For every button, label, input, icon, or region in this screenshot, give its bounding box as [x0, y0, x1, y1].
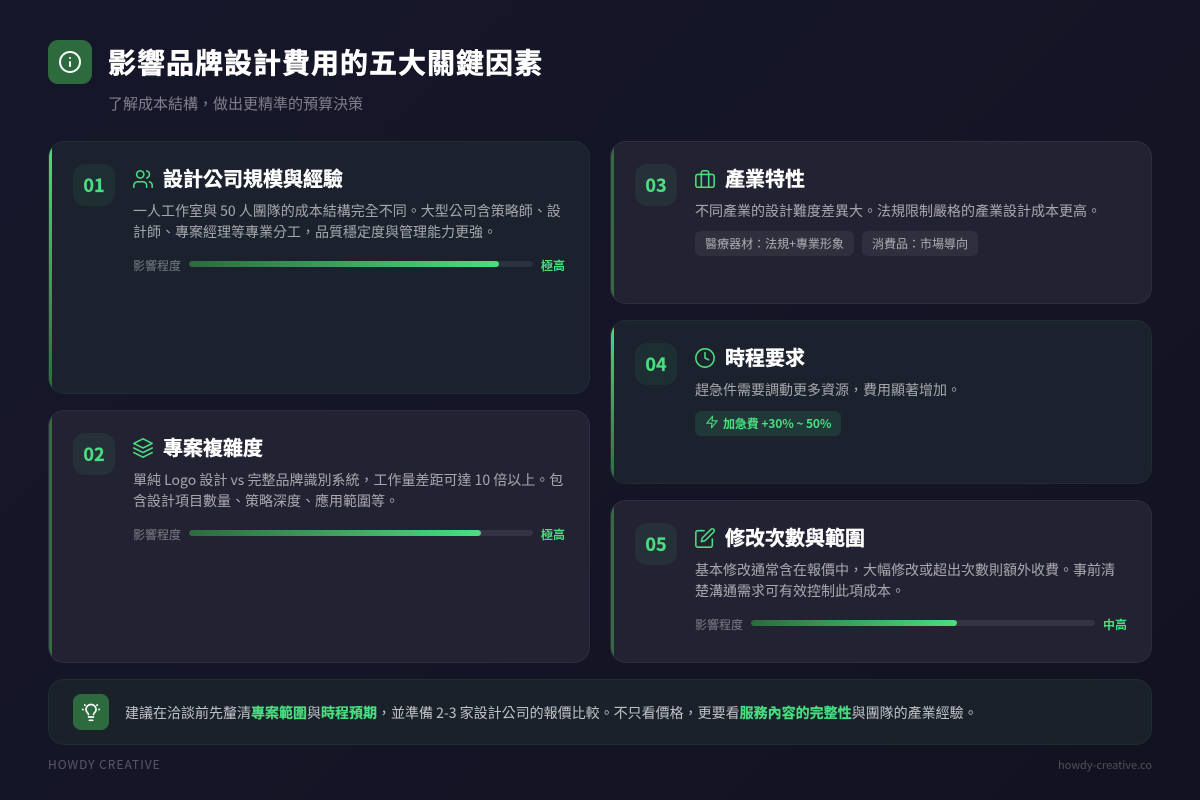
callout: advice — [48, 679, 1152, 745]
icon: briefcase — [695, 170, 715, 188]
number badge 04 — [635, 343, 677, 385]
description 02: 含設計項目數量、策略深度、應用範圍等。 — [133, 491, 399, 511]
number badge 05: 05 — [645, 531, 667, 557]
panel: factor 01 — [48, 141, 590, 394]
impact bar 05: 60% — [751, 620, 1095, 626]
number badge 02 — [73, 433, 115, 475]
number badge 04: 04 — [645, 351, 667, 377]
advice text: 建議在洽談前先釐清專案範圍與時程預期，並準備 2-3 家設計公司的報價比較。不只看價格，更要看服務內容的完整性與團隊的產業經驗。 — [125, 703, 978, 723]
description 01: 計師、專案經理等專業分工，品質穩定度與管理能力更強。 — [133, 222, 497, 242]
description 05: 楚溝通需求可有效控制此項成本。 — [695, 581, 905, 601]
tag: rush fee: 加急費 +30% ~ 50% — [723, 415, 831, 432]
number badge 03 — [635, 164, 677, 206]
impact value 05: 中高 — [1103, 616, 1127, 633]
description 02: 單純 Logo 設計 vs 完整品牌識別系統，工作量差距可達 10 倍以上。包 — [133, 470, 563, 490]
number badge 01: 01 — [83, 172, 105, 198]
tag: rush fee — [695, 411, 841, 436]
number badge 05 — [635, 523, 677, 565]
panel: factor 03 — [610, 141, 1152, 304]
impact label 01: 影響程度 — [133, 257, 181, 274]
impact bar 01: 90% — [189, 261, 533, 267]
number badge 01 — [73, 164, 115, 206]
heading 01: 設計公司規模與經驗 — [163, 163, 343, 192]
description 01: 一人工作室與 50 人團隊的成本結構完全不同。大型公司含策略師、設 — [133, 201, 561, 221]
heading 03: 產業特性 — [725, 163, 805, 192]
description 02 — [133, 470, 563, 511]
icon: edit — [695, 528, 715, 548]
panel: factor 05 — [610, 500, 1152, 663]
tag: consumer goods: 消費品：市場導向 — [872, 235, 968, 252]
header icon: info — [48, 40, 92, 84]
impact label 05: 影響程度 — [695, 616, 743, 633]
heading 04: 時程要求 — [725, 342, 805, 371]
title: 影響品牌設計費用的五大關鍵因素 — [108, 42, 543, 82]
impact label 02: 影響程度 — [133, 526, 181, 543]
tag: medical — [695, 231, 854, 256]
description 05: 基本修改通常含在報價中，大幅修改或超出次數則額外收費。事前清 — [695, 560, 1115, 580]
icon: clock — [695, 348, 715, 368]
icon: layers — [133, 438, 153, 458]
description 04: 趕急件需要調動更多資源，費用顯著增加。 — [695, 380, 961, 400]
footer url: howdy-creative.co — [1058, 757, 1152, 773]
description 05 — [695, 560, 1115, 601]
heading 05: 修改次數與範圍 — [725, 522, 865, 551]
footer brand: HOWDY CREATIVE — [48, 756, 161, 773]
tag: medical: 醫療器材：法規+專業形象 — [705, 235, 844, 252]
panel: factor 02 — [48, 410, 590, 663]
number badge 03: 03 — [645, 172, 667, 198]
impact value 01: 極高 — [541, 257, 565, 274]
number badge 02: 02 — [83, 441, 105, 467]
description 03: 不同產業的設計難度差異大。法規限制嚴格的產業設計成本更高。 — [695, 201, 1101, 221]
icon: users — [133, 170, 153, 188]
heading 02: 專案複雜度 — [163, 432, 263, 461]
description 01 — [133, 201, 561, 242]
panel: factor 04 — [610, 320, 1152, 484]
subtitle: 了解成本結構，做出更精準的預算決策 — [108, 93, 363, 114]
impact value 02: 極高 — [541, 526, 565, 543]
impact bar 02: 85% — [189, 530, 533, 536]
tag: consumer goods — [862, 231, 978, 256]
icon: light bulb — [73, 694, 109, 730]
